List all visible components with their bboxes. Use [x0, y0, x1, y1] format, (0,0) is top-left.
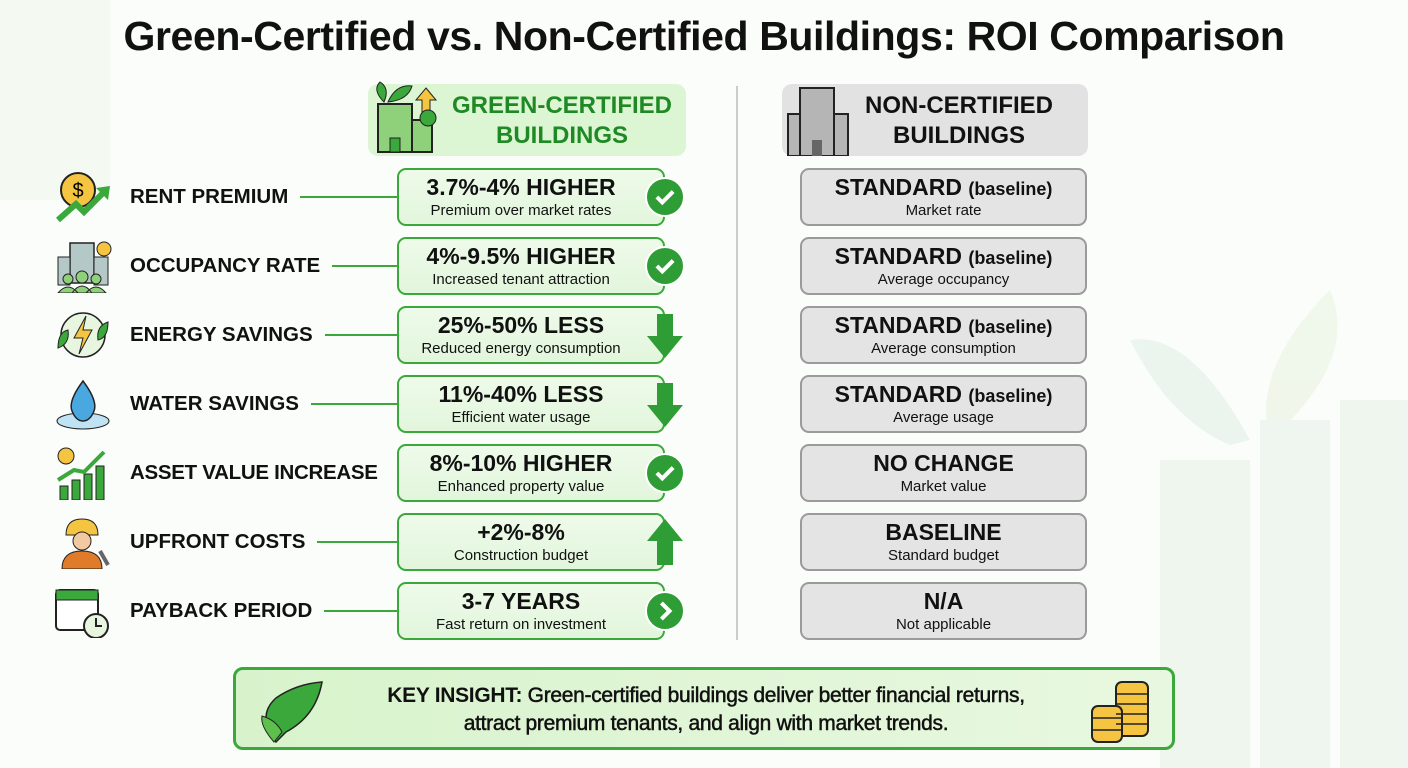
header: non-certified — [782, 84, 1088, 156]
icon: down arrow — [647, 314, 683, 358]
green box — [397, 444, 665, 502]
header: green-certified — [368, 81, 686, 156]
icon: building people — [57, 242, 112, 293]
green box: +2%-8% — [477, 519, 565, 545]
green box: Premium over market rates — [431, 202, 611, 219]
label: ENERGY SAVINGS — [130, 323, 313, 346]
green box — [397, 375, 665, 433]
label: WATER SAVINGS — [130, 392, 299, 415]
icon: check — [645, 453, 685, 493]
icon: worker — [62, 518, 110, 569]
green box: 25%-50% LESS — [438, 312, 604, 338]
green box: Fast return on investment — [436, 616, 606, 633]
divider — [736, 86, 738, 640]
grey box: STANDARD (baseline) — [835, 243, 1052, 269]
heading text: BUILDINGS — [496, 122, 628, 149]
green box: Efficient water usage — [452, 409, 590, 426]
green box: 11%-40% LESS — [439, 381, 603, 407]
icon: down arrow — [647, 383, 683, 427]
insight text: attract premium tenants, and align with market trends. — [464, 712, 948, 735]
icon: dollar — [56, 172, 110, 222]
grey box: Average consumption — [871, 340, 1016, 357]
row: rent premium — [56, 168, 1087, 226]
heading text: GREEN-CERTIFIED — [452, 92, 672, 119]
icon: green building — [376, 81, 437, 153]
label: ASSET VALUE INCREASE — [130, 461, 378, 484]
green box: Reduced energy consumption — [421, 340, 621, 357]
row: upfront costs — [62, 513, 1087, 571]
icon: grey building — [787, 87, 849, 156]
grey box — [800, 582, 1087, 640]
grey box — [800, 306, 1087, 364]
icon: water drop — [56, 380, 110, 430]
heading text: BUILDINGS — [893, 122, 1025, 149]
icon: dollar: $ — [72, 180, 84, 202]
grey box — [800, 444, 1087, 502]
icon: calendar clock — [55, 589, 109, 638]
green box — [397, 582, 665, 640]
icon: up arrow — [647, 519, 683, 565]
green box: 3.7%-4% HIGHER — [426, 174, 616, 200]
row: water — [56, 375, 1087, 433]
green box: 3-7 YEARS — [462, 588, 580, 614]
icon: check — [645, 177, 685, 217]
green box — [397, 306, 665, 364]
grey box: Market value — [901, 478, 986, 495]
green box: 4%-9.5% HIGHER — [426, 243, 616, 269]
grey box: STANDARD (baseline) — [835, 381, 1052, 407]
green box: Enhanced property value — [438, 478, 604, 495]
row: occupancy — [57, 237, 1087, 295]
icon: leaves — [261, 681, 323, 744]
grey box — [800, 375, 1087, 433]
label: UPFRONT COSTS — [130, 530, 305, 553]
grey box — [800, 237, 1087, 295]
heading text — [865, 92, 1053, 149]
grey box: N/A — [924, 588, 963, 614]
grey box: STANDARD (baseline) — [835, 312, 1052, 338]
grey box: STANDARD (baseline) — [835, 174, 1052, 200]
green box: 8%-10% HIGHER — [430, 450, 612, 476]
grey box: Average usage — [893, 409, 994, 426]
icon: energy — [58, 312, 108, 358]
heading text: NON-CERTIFIED — [865, 92, 1053, 119]
title: Green-Certified vs. Non-Certified Buildings: ROI Comparison — [124, 13, 1284, 59]
icon: coins — [1091, 681, 1149, 743]
green box: Increased tenant attraction — [432, 271, 610, 288]
icon: chevron — [645, 591, 685, 631]
insight text — [387, 684, 1025, 735]
grey box: Market rate — [906, 202, 981, 219]
icon: chart — [57, 448, 106, 500]
grey box: Average occupancy — [878, 271, 1009, 288]
grey box — [800, 168, 1087, 226]
label: RENT PREMIUM — [130, 185, 288, 208]
green box — [397, 168, 665, 226]
insight text: KEY INSIGHT: Green-certified buildings deliver better financial returns, — [387, 684, 1025, 707]
grey box: BASELINE — [885, 519, 1002, 545]
green box — [397, 237, 665, 295]
row: asset value — [57, 444, 1087, 502]
icon: check — [645, 246, 685, 286]
green box: Construction budget — [454, 547, 588, 564]
grey box: Standard budget — [888, 547, 999, 564]
row: payback — [55, 582, 1087, 640]
grey box — [800, 513, 1087, 571]
key insight callout — [233, 667, 1175, 750]
label: OCCUPANCY RATE — [130, 254, 320, 277]
label: PAYBACK PERIOD — [130, 599, 312, 622]
green box — [397, 513, 665, 571]
grey box: Not applicable — [896, 616, 991, 633]
heading text — [452, 92, 672, 149]
grey box: NO CHANGE — [873, 450, 1014, 476]
row: energy — [58, 306, 1087, 364]
